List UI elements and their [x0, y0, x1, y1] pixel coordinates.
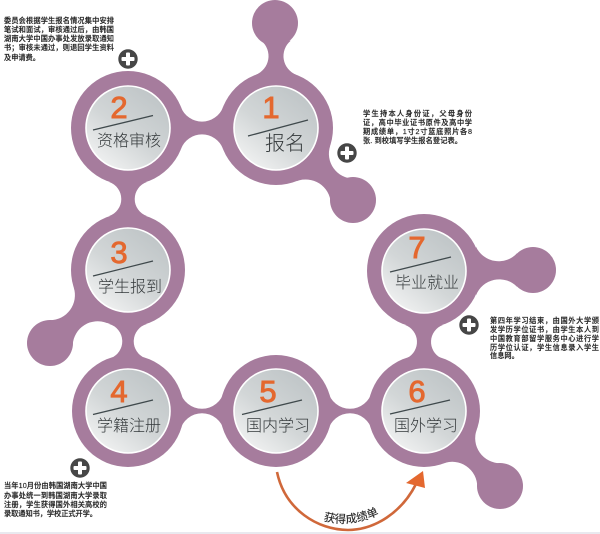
icon: plus for step 4	[70, 458, 90, 478]
text block: step 2 description: 委员会根据学生报名情况集中安排	[4, 16, 114, 25]
step 5: 国内学习: 国内学习	[246, 417, 310, 435]
icon: plus for step 7	[459, 315, 479, 335]
step 7: 毕业就业: 毕业就业	[395, 274, 459, 292]
text block: step 2 description: 湖南大学中国办事处发放录取通知	[4, 34, 114, 43]
step 2: 资格审核	[86, 86, 170, 170]
step 5: 国内学习: 5	[259, 374, 277, 409]
step 2: 资格审核: 资格审核	[97, 132, 161, 150]
text block: step 4 description: 注册，学生获得国外相关高校的	[4, 500, 107, 509]
arrow label: 获得成绩单	[324, 507, 378, 524]
step 1: 报名: 报名	[265, 132, 305, 155]
text block: step 1 description: 证，高中毕业证书原件及高中学	[363, 118, 472, 127]
step 5: 国内学习	[234, 369, 318, 453]
text block: step 7 description: 发学历学位证书，由学生本人到	[490, 325, 599, 334]
step 4: 学籍注册	[86, 369, 170, 453]
text block: step 4 description: 办事处统一到韩国湖南大学录取	[4, 491, 107, 500]
step 1: 报名: 1	[262, 90, 280, 125]
text block: step 2 description: 及申请费。	[4, 53, 40, 62]
step 1: 报名	[234, 86, 318, 170]
step 4: 学籍注册: 4	[110, 374, 128, 409]
step 2: 资格审核: 2	[110, 90, 128, 125]
text block: step 2 description: 书；审核未通过，则退回学生资料	[4, 43, 114, 52]
text block: step 1 description	[363, 109, 473, 145]
text block: step 7 description: 信息网。	[490, 351, 519, 360]
step 7: 毕业就业	[382, 229, 466, 313]
text block: step 4 description: 当年10月份由韩国湖南大学中国	[4, 481, 107, 490]
text block: step 7 description: 历学位认证，学生信息录入学生	[490, 343, 599, 352]
step 3: 学生报到: 学生报到	[98, 278, 162, 296]
step 6: 国外学习: 6	[408, 374, 426, 409]
text block: step 2 description	[4, 16, 114, 62]
step 6: 国外学习	[382, 369, 466, 453]
icon: plus for step 1	[337, 143, 357, 163]
icon: plus for step 2	[118, 49, 138, 69]
text block: step 7 description: 中国教育部留学服务中心进行学	[490, 334, 599, 343]
text block: step 1 description: 张. 到校填写学生报名登记表。	[363, 136, 462, 145]
step 3: 学生报到: 3	[110, 235, 128, 270]
step 7: 毕业就业: 7	[408, 230, 426, 265]
step 4: 学籍注册: 学籍注册	[97, 417, 161, 435]
text block: step 2 description: 笔试和面试，审核通过后，由韩国	[4, 25, 114, 34]
step 6: 国外学习: 国外学习	[394, 417, 458, 435]
text block: step 7 description	[490, 316, 599, 360]
bottom edge strip	[0, 532, 600, 534]
text block: step 4 description: 录取通知书，学校正式开学。	[4, 509, 97, 518]
step 3: 学生报到	[86, 228, 170, 312]
text block: step 1 description: 期成绩单，1寸2寸蓝底照片各8	[363, 127, 472, 136]
arrow: from step 5 to step 6	[277, 471, 425, 530]
text block: step 1 description: 学生持本人身份证，父母身份	[363, 109, 473, 118]
text block: step 4 description	[4, 481, 107, 518]
text block: step 7 description: 第四年学习结束，由国外大学颁	[490, 316, 599, 325]
